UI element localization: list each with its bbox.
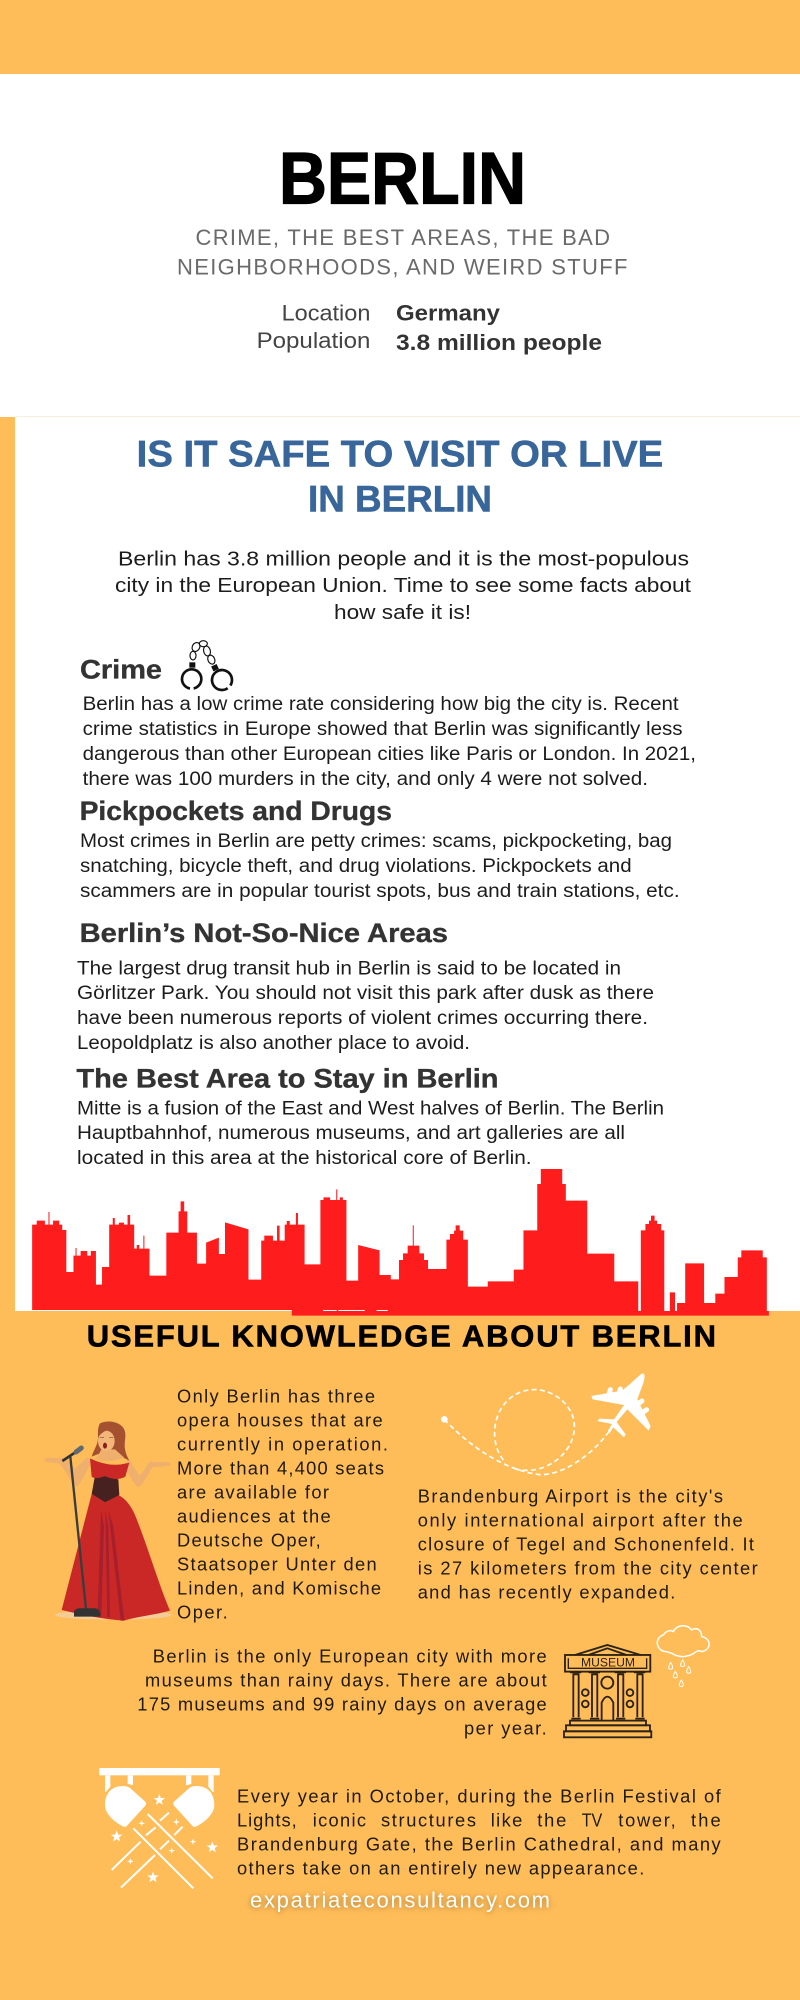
airport text: is 27 kilometers from the city center: [418, 1557, 758, 1578]
opera text: Linden, and Komische: [177, 1577, 381, 1598]
opera text: Staatsoper Unter den: [177, 1553, 377, 1574]
museum text: per year.: [464, 1718, 547, 1739]
section heading: is it safe: IN BERLIN: [308, 478, 492, 519]
crime text: dangerous than other European cities like Paris or London. In 2021,: [83, 744, 696, 765]
red city skyline: [32, 1169, 769, 1316]
heading: not-so-nice areas: Berlin’s Not-So-Nice Areas: [80, 918, 448, 948]
icon: airplane with dashed route: [441, 1373, 651, 1475]
icon: museum building: MUSEUM: [581, 1657, 635, 1670]
opera text: More than 4,400 seats: [177, 1457, 384, 1478]
best area text: [77, 1098, 664, 1169]
subtitle: NEIGHBORHOODS, AND WEIRD STUFF: [177, 254, 628, 279]
heading: pickpockets and drugs: Pickpockets and Drugs: [80, 796, 392, 826]
location and population facts: Location: [282, 300, 370, 325]
museum text: [137, 1646, 547, 1739]
museum text: 175 museums and 99 rainy days on average: [137, 1694, 547, 1715]
location and population facts: Population: [257, 328, 370, 353]
airport text: [418, 1485, 758, 1602]
museum text: museums than rainy days. There are about: [145, 1670, 547, 1691]
festival text: structures: [381, 1809, 476, 1830]
crime text: [83, 694, 696, 790]
crime text: Berlin has a low crime rate considering how big the city is. Recent: [83, 694, 679, 715]
website footer: expatriateconsultancy.com: [250, 1888, 550, 1913]
airport text: Brandenburg Airport is the city's: [418, 1485, 723, 1506]
festival text: others take on an entirely new appearance.: [237, 1857, 644, 1878]
icon: museum building: [564, 1645, 651, 1737]
opera text: Deutsche Oper,: [177, 1529, 321, 1550]
festival text: like: [491, 1809, 522, 1830]
festival text: [237, 1785, 722, 1878]
festival text: the: [691, 1809, 721, 1830]
panel: safety section: [15, 417, 800, 1311]
heading: best area to stay: The Best Area to Stay in Berlin: [76, 1063, 498, 1093]
opera text: Only Berlin has three: [177, 1385, 375, 1406]
opera text: Oper.: [177, 1601, 228, 1622]
festival text: Brandenburg Gate, the Berlin Cathedral, and many: [237, 1833, 722, 1854]
festival text: TV: [582, 1809, 603, 1830]
location and population facts: 3.8 million people: [396, 330, 602, 355]
festival text: Lights,: [237, 1809, 297, 1830]
opera text: opera houses that are: [177, 1409, 383, 1430]
intro paragraph: city in the European Union. Time to see some facts about: [115, 574, 691, 597]
intro paragraph: Berlin has 3.8 million people and it is the most-populous: [118, 547, 689, 570]
section heading: useful knowledge: USEFUL KNOWLEDGE ABOUT BERLIN: [87, 1319, 716, 1354]
opera text: [177, 1385, 388, 1622]
intro paragraph: how safe it is!: [334, 601, 471, 624]
festival text: the: [537, 1809, 566, 1830]
best area text: Hauptbahnhof, numerous museums, and art galleries are all: [77, 1123, 625, 1144]
best area text: Mitte is a fusion of the East and West halves of Berlin. The Berlin: [77, 1098, 664, 1119]
subtitle: CRIME, THE BEST AREAS, THE BAD: [196, 225, 610, 250]
location and population facts: [257, 300, 602, 355]
not-so-nice areas text: Leopoldplatz is also another place to avoid.: [77, 1033, 470, 1054]
panel: header: [0, 74, 800, 417]
pickpockets text: [80, 831, 680, 902]
subtitle: [177, 225, 628, 279]
pickpockets text: scammers are in popular tourist spots, bus and train stations, etc.: [80, 881, 680, 902]
heading: crime: Crime: [80, 654, 162, 684]
festival text: Every year in October, during the Berlin Festival of: [237, 1785, 722, 1806]
airport text: only international airport after the: [418, 1509, 743, 1530]
section heading: is it safe: [137, 434, 663, 519]
airport text: and has recently expanded.: [418, 1581, 675, 1602]
opera text: currently in operation.: [177, 1433, 388, 1454]
section heading: is it safe: IS IT SAFE TO VISIT OR LIVE: [137, 434, 663, 474]
icon: rain cloud: [657, 1626, 709, 1687]
not-so-nice areas text: [77, 958, 654, 1054]
illustration: opera singer: [46, 1422, 172, 1621]
icon: handcuffs: [180, 641, 236, 694]
best area text: located in this area at the historical core of Berlin.: [77, 1148, 532, 1169]
opera text: are available for: [177, 1481, 329, 1502]
crime text: crime statistics in Europe showed that Berlin was significantly less: [83, 719, 683, 740]
festival text: iconic: [313, 1809, 366, 1830]
pickpockets text: snatching, bicycle theft, and drug violations. Pickpockets and: [80, 856, 632, 877]
location and population facts: Germany: [396, 300, 501, 325]
not-so-nice areas text: have been numerous reports of violent crimes occurring there.: [77, 1008, 648, 1029]
title: BERLIN: [279, 138, 526, 220]
opera text: audiences at the: [177, 1505, 331, 1526]
not-so-nice areas text: The largest drug transit hub in Berlin is said to be located in: [77, 958, 621, 979]
intro paragraph: [115, 547, 691, 624]
pickpockets text: Most crimes in Berlin are petty crimes: scams, pickpocketing, bag: [80, 831, 672, 852]
airport text: closure of Tegel and Schonenfeld. It: [418, 1533, 754, 1554]
museum text: Berlin is the only European city with more: [153, 1646, 547, 1667]
not-so-nice areas text: Görlitzer Park. You should not visit this park after dusk as there: [77, 983, 654, 1004]
crime text: there was 100 murders in the city, and only 4 were not solved.: [83, 769, 648, 790]
festival text: tower,: [618, 1809, 676, 1830]
icon: festival spotlights: [99, 1768, 220, 1888]
